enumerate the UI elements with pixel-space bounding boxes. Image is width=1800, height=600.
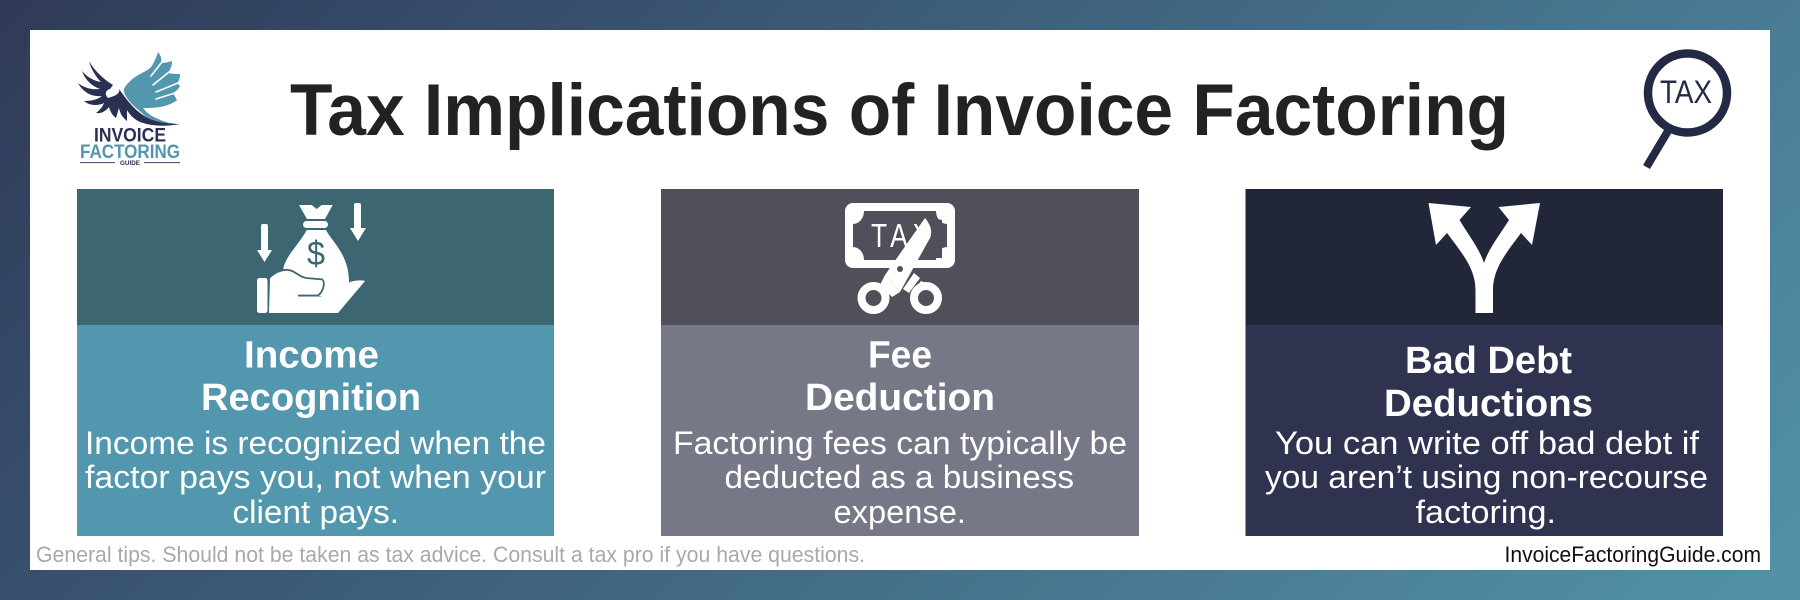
heading: Fee Deduction: Deduction: [805, 377, 995, 419]
body text: bad debt: [1265, 425, 1708, 530]
title: Tax Implications of Invoice Factoring: [290, 70, 1509, 151]
icon: scissors cutting tax bill: [845, 203, 955, 310]
panel header: income: [77, 189, 554, 325]
logo wordmark: GUIDE: GUIDE: [120, 161, 140, 167]
heading: Bad Debt Deductions: Bad Debt: [1405, 340, 1572, 382]
heading: Bad Debt Deductions: Deductions: [1384, 383, 1593, 425]
body text: fee: deducted as a business: [724, 459, 1074, 495]
body text: fee: Factoring fees can typically be: [673, 425, 1127, 461]
icon: scissors cutting tax bill: TAX: [871, 218, 930, 255]
heading: Income Recognition: Recognition: [201, 377, 421, 419]
body text: income: Income is recognized when the: [85, 425, 546, 461]
panel body: income: [77, 325, 554, 536]
heading: Income Recognition: Income: [244, 335, 379, 377]
body text: income: [85, 425, 546, 530]
body text: bad debt: You can write off bad debt if: [1275, 425, 1699, 461]
icon: eagle navy wing and body: [78, 61, 180, 126]
footer disclaimer: General tips. Should not be taken as tax advice. Consult a tax pro if you have questions.: [36, 542, 865, 567]
icon: magnifying glass with TAX: TAX: [1660, 74, 1712, 110]
panel: income recognition: [77, 189, 554, 536]
panel: fee deduction: [661, 189, 1139, 536]
footer website: InvoiceFactoringGuide.com: [1504, 542, 1761, 567]
icon: magnifying glass with TAX: [1646, 54, 1727, 167]
body text: bad debt: factoring.: [1416, 494, 1556, 530]
panel: bad debt deductions: [1246, 189, 1723, 536]
heading: Bad Debt Deductions: [1384, 340, 1593, 425]
heading: Income Recognition: [201, 335, 421, 419]
body text: fee: [673, 425, 1127, 530]
body text: income: client pays.: [232, 494, 399, 530]
icon: money bag on hand with arrows: $: [307, 235, 325, 273]
body text: fee: expense.: [834, 494, 966, 530]
heading: Fee Deduction: Fee: [868, 335, 932, 377]
panel header: bad debt: [1246, 189, 1723, 325]
icon: money bag on hand with arrows: [257, 203, 366, 313]
logo wordmark: INVOICE: INVOICE: [94, 125, 166, 147]
body text: bad debt: you aren’t using non-recourse: [1265, 459, 1708, 495]
body text: income: factor pays you, not when your: [85, 459, 546, 495]
heading: Fee Deduction: [805, 335, 995, 419]
panel body: bad debt: [1246, 325, 1723, 536]
icon: eagle teal wing: [124, 52, 180, 124]
icon: forked arrow: [1428, 203, 1540, 313]
panel body: fee: [661, 325, 1139, 536]
logo: Invoice Factoring Guide: [78, 52, 180, 167]
logo wordmark: FACTORING: FACTORING: [80, 141, 180, 163]
panel header: fee: [661, 189, 1139, 325]
